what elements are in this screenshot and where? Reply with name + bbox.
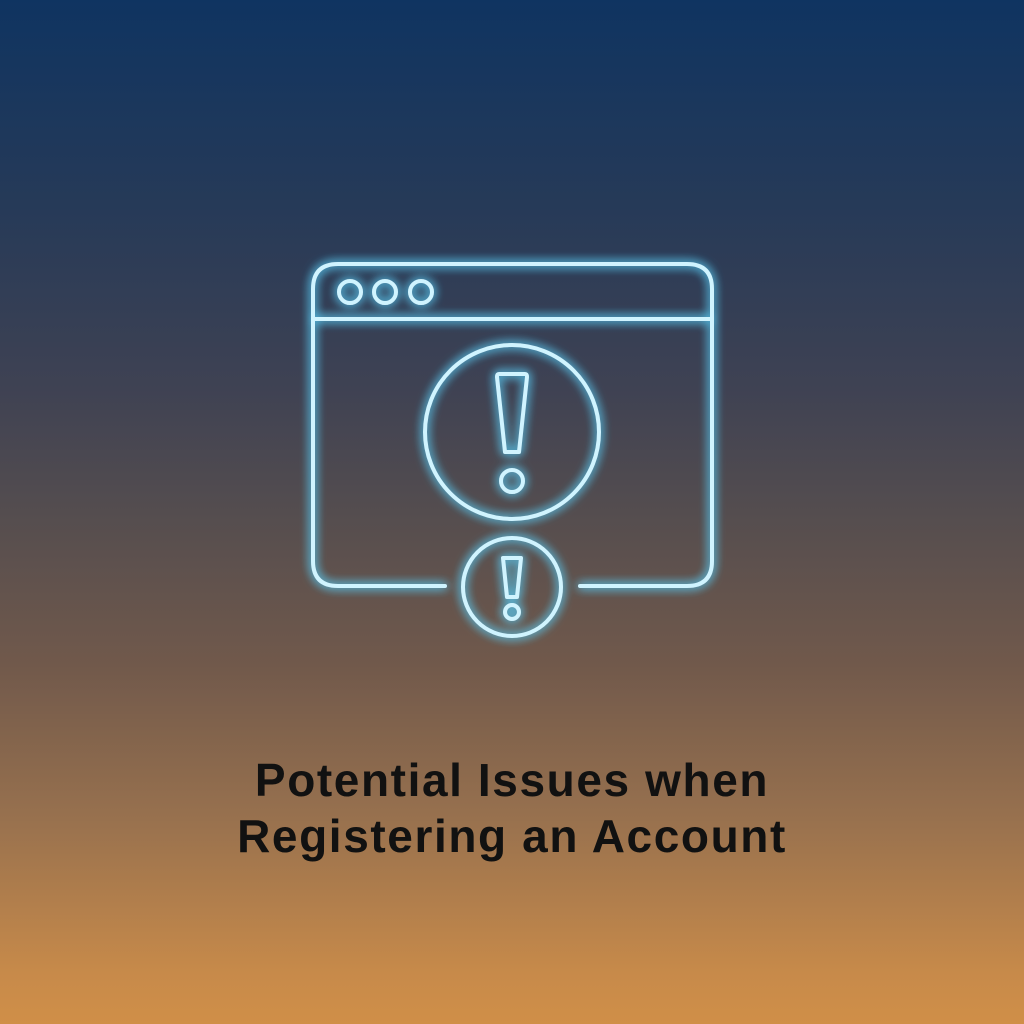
browser frame — [313, 264, 712, 586]
big warning circle — [425, 345, 599, 519]
title: Registering an Account — [237, 810, 787, 862]
title — [237, 754, 787, 862]
small warning circle — [463, 538, 561, 636]
title: Potential Issues when — [255, 754, 769, 806]
